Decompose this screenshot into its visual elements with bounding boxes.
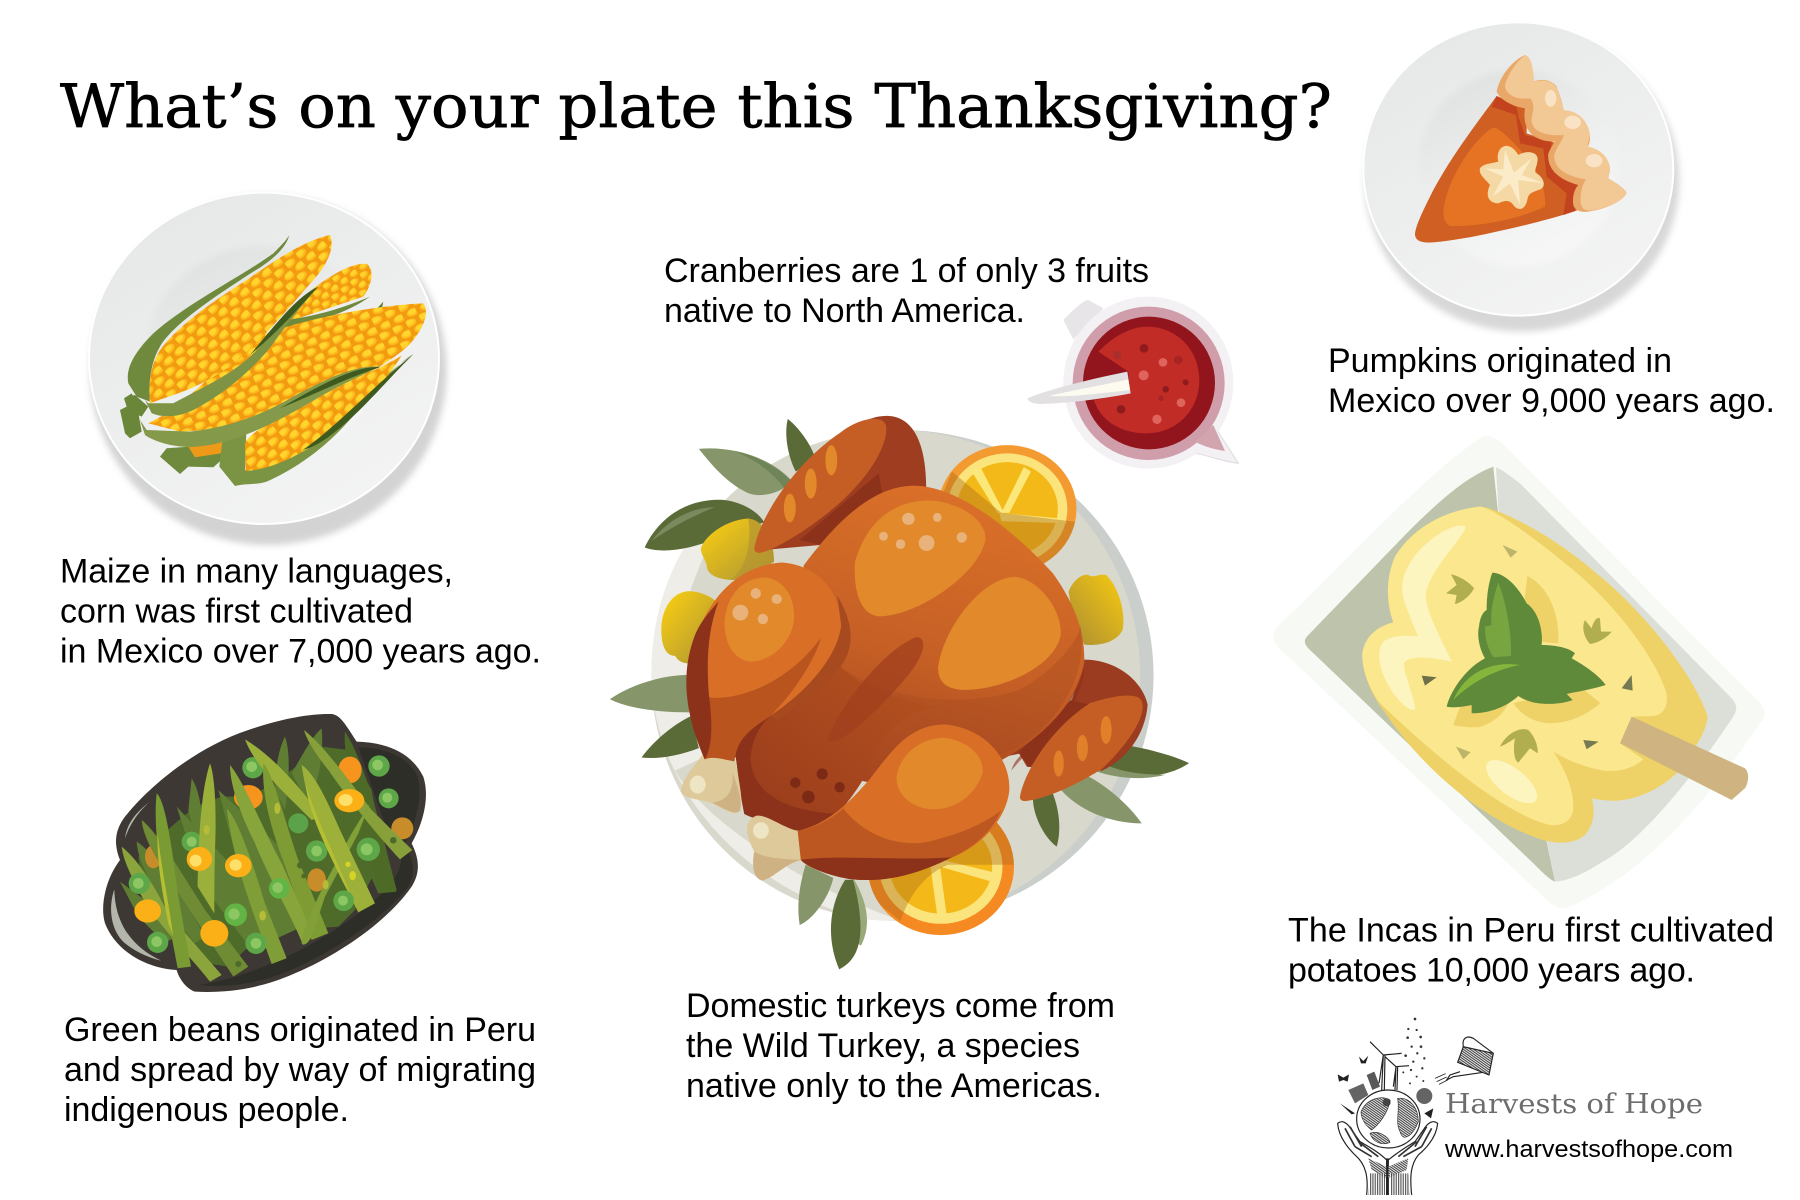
plate shadow [90, 195, 447, 545]
bowl spout [1195, 422, 1238, 463]
butterflies, tractor and plants [1338, 1056, 1433, 1118]
top wing [754, 419, 886, 553]
back beans [120, 728, 397, 950]
globe [1357, 1090, 1420, 1148]
green beans [122, 730, 412, 982]
platter [651, 430, 1154, 921]
bowl handle [1063, 300, 1103, 339]
right drumstick [798, 724, 1009, 880]
orange slice top [941, 445, 1076, 564]
panel: mashed potatoes [1273, 436, 1765, 909]
dish shadow [198, 747, 419, 986]
logo: Harvests of Hope [1338, 1018, 1733, 1195]
text: green beans: Green beans originated in Peru [64, 1011, 536, 1049]
orange slice bottom [869, 822, 1014, 936]
text: turkeys: native only to the Americas. [686, 1067, 1102, 1105]
text: green beans [64, 1011, 536, 1129]
dish glints [111, 802, 161, 961]
breast fold [827, 637, 923, 742]
cranberry sauce [1094, 327, 1199, 433]
plate shadow [1365, 28, 1679, 332]
text: pumpkins: Mexico over 9,000 years ago. [1328, 382, 1775, 420]
watering can [1435, 1037, 1493, 1084]
dish [103, 714, 426, 992]
lower peas and corn [145, 757, 413, 892]
text: maize: corn was first cultivated [60, 593, 413, 631]
back bean mass [138, 747, 397, 967]
text: maize: Maize in many languages, [60, 553, 453, 591]
pie plate [1363, 22, 1673, 316]
panel: green beans dish [103, 714, 426, 992]
logo mark: hands, globe, watering can [1338, 1018, 1493, 1195]
serving spoon [1027, 372, 1131, 404]
wing behind left [758, 416, 926, 551]
logo url: www.harvestsofhope.com [1444, 1136, 1733, 1163]
title: What’s on your plate this Thanksgiving? [60, 72, 1332, 142]
potato highlight [1379, 526, 1544, 811]
mint leaves [1447, 573, 1606, 713]
seeds [1402, 1018, 1425, 1084]
lemons [661, 519, 1123, 663]
text: turkeys: Domestic turkeys come from [686, 987, 1115, 1025]
text: maize: in Mexico over 7,000 years ago. [60, 633, 541, 671]
text: pumpkins: Pumpkins originated in [1328, 342, 1672, 380]
left drumstick [686, 563, 851, 761]
text: cranberries [664, 252, 1149, 330]
panel: corn on plate [89, 193, 447, 545]
panel: pumpkin pie on plate [1363, 22, 1679, 332]
text: potatoes: potatoes 10,000 years ago. [1288, 952, 1695, 990]
potato mash [1362, 507, 1667, 825]
shadow under mint [1453, 576, 1601, 727]
logo wordmark: Harvests of Hope [1445, 1089, 1703, 1120]
sauce dots [1113, 344, 1189, 424]
text: maize [60, 553, 541, 671]
text: potatoes: The Incas in Peru first cultivated [1288, 912, 1774, 950]
corn cobs [120, 235, 426, 486]
text: pumpkins [1328, 342, 1775, 420]
spoon handle [1620, 717, 1748, 800]
tray [1305, 467, 1736, 882]
pie slice [1415, 55, 1627, 243]
bowl inner ring [1073, 307, 1225, 460]
lower thigh [736, 663, 940, 831]
hands [1338, 1122, 1438, 1195]
turkey body [734, 486, 1084, 784]
text: green beans: and spread by way of migrating [64, 1051, 536, 1089]
right wing [1020, 695, 1143, 801]
wing right dark fold [1019, 700, 1090, 767]
corn plate [89, 193, 439, 524]
wing behind right [1001, 660, 1148, 771]
panel: cranberry sauce bowl [1027, 297, 1238, 469]
potato mash shadow layer [1362, 507, 1708, 843]
bowl rim [1063, 297, 1233, 469]
bowl spout pink [1195, 425, 1225, 451]
bones [681, 752, 802, 881]
text: turkeys [686, 987, 1115, 1105]
text: cranberries: Cranberries are 1 of only 3 fruits [664, 252, 1149, 290]
text: potatoes [1288, 912, 1774, 990]
herb flecks [1422, 545, 1633, 763]
wind turbines [1370, 1042, 1409, 1090]
text: cranberries: native to North America. [664, 292, 1025, 330]
text: green beans: indigenous people. [64, 1091, 349, 1129]
continents [1361, 1098, 1418, 1144]
breast highlights [855, 500, 986, 616]
garnish leaves [610, 419, 1189, 969]
text: turkeys: the Wild Turkey, a species [686, 1027, 1080, 1065]
tray halo [1273, 436, 1765, 909]
sauce dark edge [1083, 317, 1215, 449]
panel: roast turkey platter [610, 416, 1189, 969]
skin dots [879, 513, 967, 551]
wing dark fold [800, 473, 882, 545]
top peas and corn [129, 755, 399, 967]
